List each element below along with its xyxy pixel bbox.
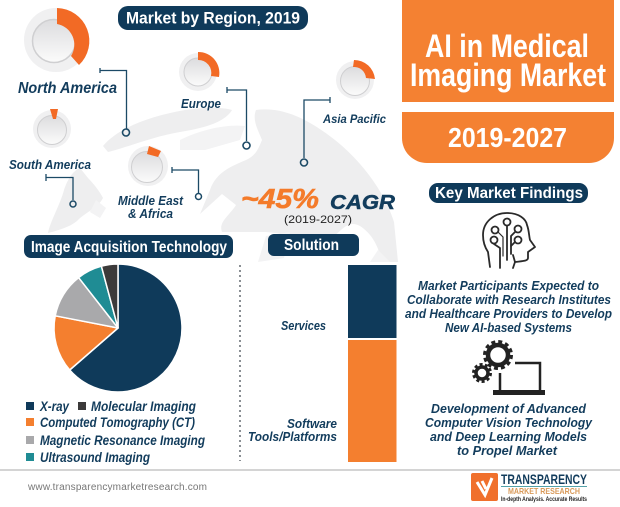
legend: X-ray [39,399,70,414]
finding text: computer vision [425,401,593,458]
donut: middle east and africa [128,146,168,186]
label: middle east and africa [118,194,184,221]
label: middle east and africa: & Africa [128,207,173,221]
stacked bar chart: solution [348,265,396,462]
heading: solution: Solution [284,237,339,254]
title banner [402,0,614,102]
pie chart [54,264,182,392]
years banner: 2019-2027 [448,122,567,153]
years banner [402,112,614,163]
title banner: AI in Medical [425,28,589,64]
label: middle east and africa: Middle East [118,194,184,208]
legend: Magnetic Resonance Imaging [40,433,206,448]
finding text: collaboration [405,278,612,335]
donut: south america [33,109,71,148]
heading: image acquisition technology [24,235,233,258]
connector: middle east and africa [172,167,202,200]
donut: north america [24,8,89,72]
heading: image acquisition technology: Image Acquisition Technology [31,239,227,256]
finding text: computer vision: to Propel Market [457,443,558,458]
label: services: Services [281,318,326,333]
connector: europe [227,87,250,149]
connector: south america [46,174,76,207]
website url: www.transparencymarketresearch.com [27,482,207,493]
callout: CAGR: ~45% [241,183,319,214]
heading: market by region: Market by Region, 2019 [126,8,300,28]
logo: In-depth Analysis. Accurate Results [501,496,587,503]
finding text: computer vision: Development of Advanced [431,401,587,416]
icon: gears and laptop [474,342,545,395]
connector: asia pacific [300,97,330,166]
heading: key market findings: Key Market Findings [435,185,583,202]
callout: CAGR: CAGR [330,192,396,214]
logo: MARKET RESEARCH [508,486,580,496]
icon: AI head [483,213,535,268]
label: software tools and platforms [248,416,337,444]
legend [26,399,206,465]
label: europe: Europe [181,97,221,111]
label: asia pacific: Asia Pacific [322,112,386,126]
finding text: collaboration: New AI-based Systems [445,320,572,335]
callout: CAGR: (2019-2027) [284,214,352,226]
legend: Ultrasound Imaging [40,450,151,465]
finding text: collaboration: Market Participants Expected to [418,278,599,293]
label: software tools and platforms: Tools/Platforms [248,429,337,444]
callout: CAGR [241,183,396,226]
donut: europe [179,52,219,91]
heading: solution [268,234,359,256]
donut: asia pacific [336,60,375,99]
label: software tools and platforms: Software [287,416,337,431]
finding text: computer vision: and Deep Learning Models [430,429,587,444]
world map background [48,108,398,262]
finding text: computer vision: Computer Vision Technology [425,415,593,430]
logo: TRANSPARENCY [501,471,587,487]
connector: north america [100,68,130,136]
label: north america: North America [18,80,117,97]
label: south america: South America [9,158,91,172]
logo [471,471,587,503]
legend: Computed Tomography (CT) [40,415,195,430]
legend: Molecular Imaging [91,399,197,414]
